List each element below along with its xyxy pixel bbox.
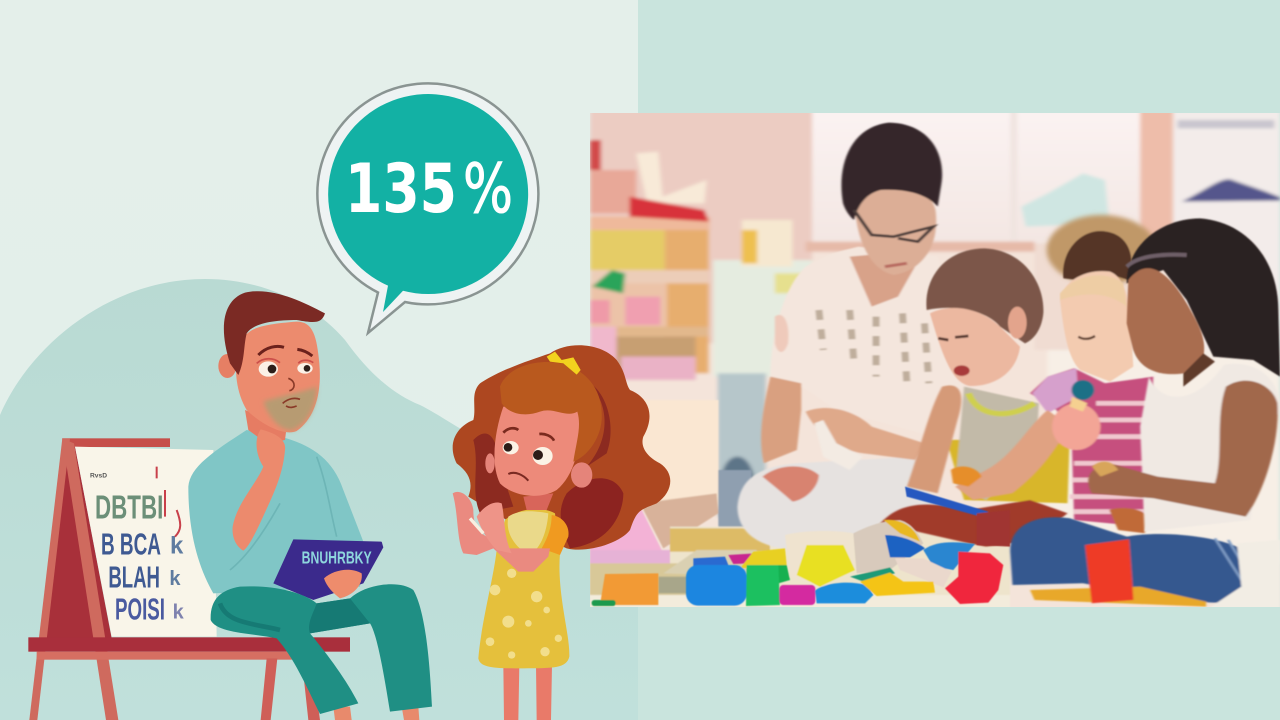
girl's eyes (503, 428, 554, 465)
easel with letter chart (28, 438, 350, 720)
girl's dress (478, 509, 569, 668)
girl's neck (523, 493, 553, 510)
man's arm and hand at chin (233, 429, 285, 551)
red trousers (880, 500, 1068, 547)
photo: teacher with children playing (590, 110, 1280, 610)
photo: girl in white top head (1127, 218, 1280, 387)
dress pattern (486, 569, 562, 659)
photo: coloured toys on floor (592, 487, 1010, 606)
girl's face (494, 407, 580, 496)
man's ear (218, 354, 236, 378)
dress collar (508, 511, 548, 555)
poster lettering: B BCA (101, 527, 161, 561)
man's hair (224, 291, 325, 375)
bench lower rail (37, 652, 293, 660)
arm (955, 410, 1070, 500)
man's nose and mouth (283, 378, 300, 407)
bubble fill (328, 94, 528, 312)
teacher's face (854, 183, 936, 275)
girl's back hair (453, 345, 670, 550)
girl's raised hand (477, 502, 512, 553)
man's shirt (188, 430, 363, 593)
photo: child in grey shirt body (880, 385, 1070, 547)
easel dark back panel (42, 447, 112, 638)
arm (907, 385, 961, 493)
man's eyes (257, 346, 313, 377)
photo: child in striped shirt head (1047, 215, 1157, 382)
jeans (1010, 517, 1263, 603)
poster lettering (90, 467, 185, 626)
teacher's neck (850, 250, 924, 307)
poster lettering: RvsD (90, 472, 107, 479)
girl's legs (503, 665, 552, 720)
tablet: BNUHRBKY (302, 547, 372, 567)
dress sleeve (542, 515, 569, 555)
bench (28, 637, 350, 652)
white tank top (1140, 364, 1280, 532)
blue pad hand-held toy (905, 487, 988, 517)
man's face (236, 322, 320, 432)
bubble outline (317, 83, 538, 333)
girl's arm (453, 492, 550, 572)
poster lettering: POISI (115, 592, 165, 626)
stubble shading (263, 387, 317, 430)
photo: child in grey shirt head (926, 248, 1043, 386)
poster lettering: k (173, 601, 185, 623)
man sitting (188, 291, 432, 720)
man's neck (245, 410, 287, 443)
photo: teacher (737, 123, 964, 550)
statistic: 135 (345, 150, 457, 229)
poster lettering: DBTBI (95, 489, 163, 526)
statistic: % (463, 150, 513, 229)
grey shirt (955, 387, 1039, 500)
easel left leg (29, 438, 70, 720)
arm (1088, 381, 1278, 517)
hair shadow (561, 478, 623, 548)
teacher's glasses (854, 210, 933, 242)
poster lettering: BLAH (108, 560, 160, 594)
easel top bar (62, 438, 170, 447)
poster lettering: k (169, 568, 181, 590)
sock and shoes (853, 520, 923, 573)
photo room background (590, 110, 1280, 610)
girl's mouth (508, 473, 528, 481)
panel: right background (638, 0, 1280, 720)
photo: girl in white top body (1010, 364, 1280, 610)
teacher's arm (761, 377, 801, 463)
hand with toy (1052, 403, 1101, 450)
girl standing (453, 345, 670, 720)
yellow chair (946, 438, 1070, 503)
panel: left background (0, 0, 638, 720)
man's hand on tablet (324, 570, 362, 598)
teacher's trousers (737, 457, 933, 550)
bench legs (261, 658, 320, 720)
girl's fringe (500, 362, 602, 462)
tablet (273, 539, 383, 600)
girl's hair bow (547, 352, 581, 375)
photo: child in striped shirt body (951, 368, 1153, 533)
background hill shape (0, 279, 638, 720)
cream block (785, 531, 855, 587)
striped shirt (1030, 368, 1153, 527)
photo floor and play box (590, 400, 1010, 608)
speech bubble with 135% (317, 83, 538, 333)
easel right leg (62, 438, 118, 720)
teacher's sweater (770, 247, 964, 437)
man's feet (333, 707, 419, 720)
poster lettering: k (170, 532, 184, 559)
girl's ear (571, 462, 592, 488)
man's trousers (211, 584, 432, 714)
teacher's hair (841, 123, 942, 220)
poster (75, 447, 217, 637)
